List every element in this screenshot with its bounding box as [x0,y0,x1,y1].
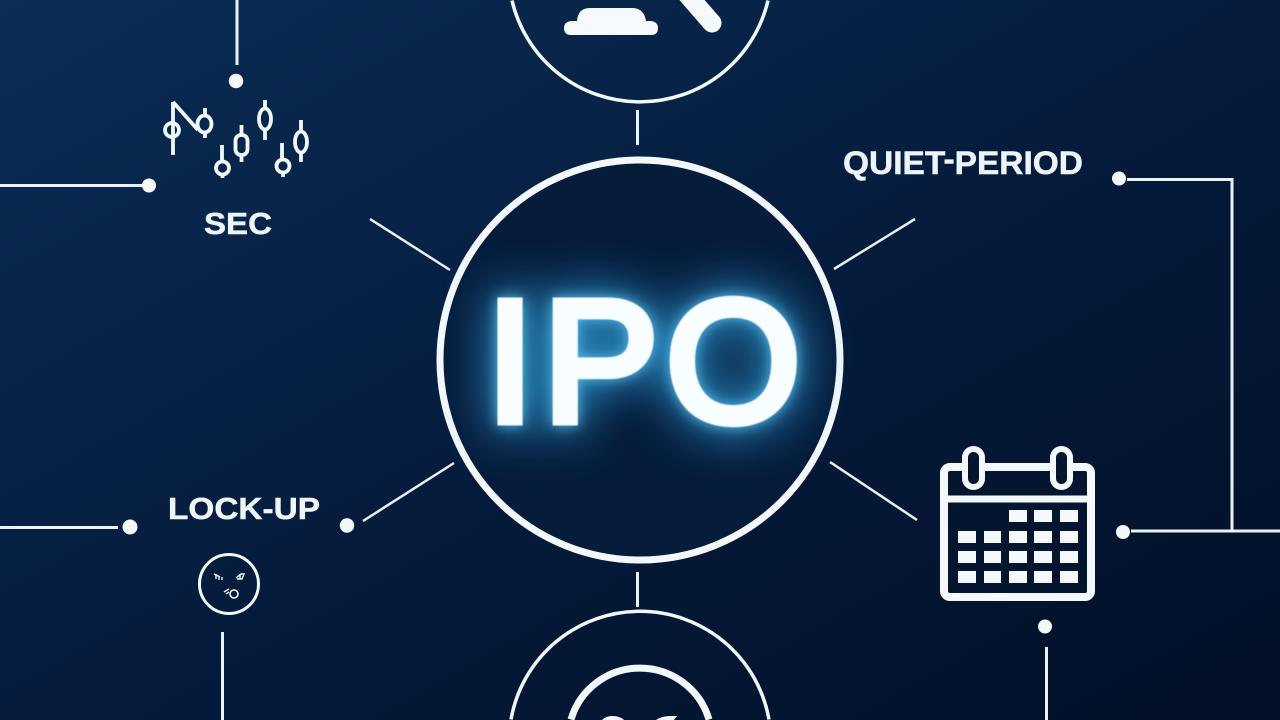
SEC branch: line and node from left [0,178,156,192]
icon: small face circle [200,554,258,614]
lock-up branch: line down [221,632,224,720]
connector: centre to upper right [834,219,915,269]
calendar branch: node and line below [1038,620,1052,720]
title: IPO: IPO [486,264,801,458]
connector: top circle to centre [636,110,639,145]
connector: centre to lower right [830,462,917,520]
label: QUIET-PERIOD: QUIET [843,145,939,181]
lock-up branch: line and node from left [0,520,138,534]
icon: inner ring [571,668,709,720]
connector: centre to upper left [370,219,450,270]
label: QUIET-PERIOD: PERIOD [955,145,1083,181]
connector: centre to bottom circle [636,572,639,607]
title: IPO glow: IPO [486,264,801,458]
label: LOCK-UP: LOCK-UP [168,491,320,526]
SEC branch: line and node above icon [229,0,243,88]
label: QUIET-PERIOD: - [943,141,955,177]
top circle with gavel icon [512,0,768,102]
quiet period connector bracket [1112,172,1280,539]
title: IPO glow: IPO [486,264,801,458]
icon: candlestick chart [165,100,307,178]
label: SEC: SEC [204,206,272,241]
icon: gavel [564,0,722,35]
bottom circle with magnifier ring [511,611,769,720]
central circle with IPO [440,160,840,560]
connector: centre to lower left [363,463,454,521]
icon: partial glyph [602,716,677,720]
icon: calendar [944,449,1091,597]
lock-up node right [340,518,354,533]
